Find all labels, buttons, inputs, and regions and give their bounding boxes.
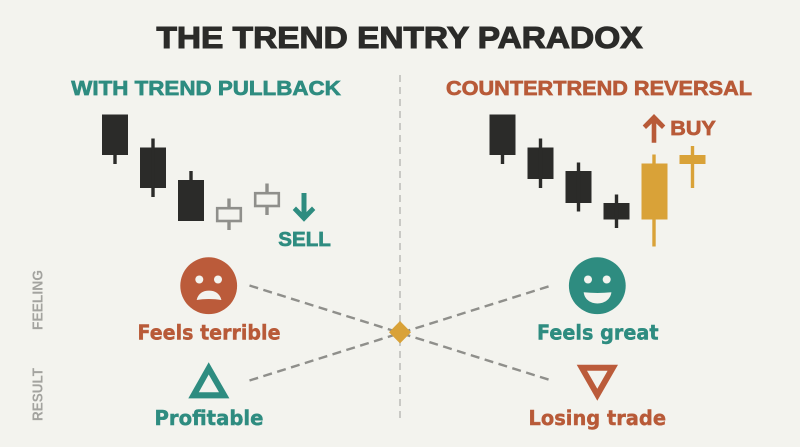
candle: bearish 2 (528, 138, 554, 188)
icon: up triangle (188, 362, 229, 398)
label: buy: BUY (670, 118, 717, 140)
chart: countertrend reversal candles (490, 114, 706, 246)
chart: with trend pullback candles (102, 114, 279, 230)
candle: bearish 4 (604, 194, 630, 228)
candle: bearish 2 (140, 138, 166, 197)
label: feels great: Feels great (537, 320, 659, 344)
connectors: crossing dashed lines (250, 286, 552, 380)
title: THE TREND ENTRY PARADOX (156, 21, 643, 55)
candle: bearish 3 (178, 171, 204, 221)
icon: down triangle (577, 365, 618, 401)
icon: happy face (569, 257, 626, 314)
label: feeling row: FEELING (31, 270, 47, 330)
label: feels terrible: Feels terrible (138, 320, 280, 344)
label: profitable: Profitable (154, 406, 264, 430)
candle: hollow pullback 1 (217, 198, 241, 230)
label: result row: RESULT (31, 368, 47, 421)
heading: countertrend reversal: COUNTERTREND REVERSAL (446, 77, 752, 100)
candle: bullish reversal (642, 154, 668, 246)
icon: sad face (180, 257, 237, 314)
candle: hollow pullback 2 (255, 184, 279, 215)
candle: bearish 1 (102, 114, 128, 164)
icon: sell arrow down (293, 193, 315, 222)
icon: buy arrow up (643, 114, 665, 143)
candle: bullish small (680, 146, 706, 188)
icon: center diamond (389, 321, 411, 343)
heading: with trend pullback: WITH TREND PULLBACK (71, 77, 341, 100)
candle: bearish 3 (566, 162, 592, 212)
label: sell: SELL (278, 229, 331, 251)
label: losing trade: Losing trade (528, 406, 666, 430)
candle: bearish 1 (490, 114, 516, 164)
